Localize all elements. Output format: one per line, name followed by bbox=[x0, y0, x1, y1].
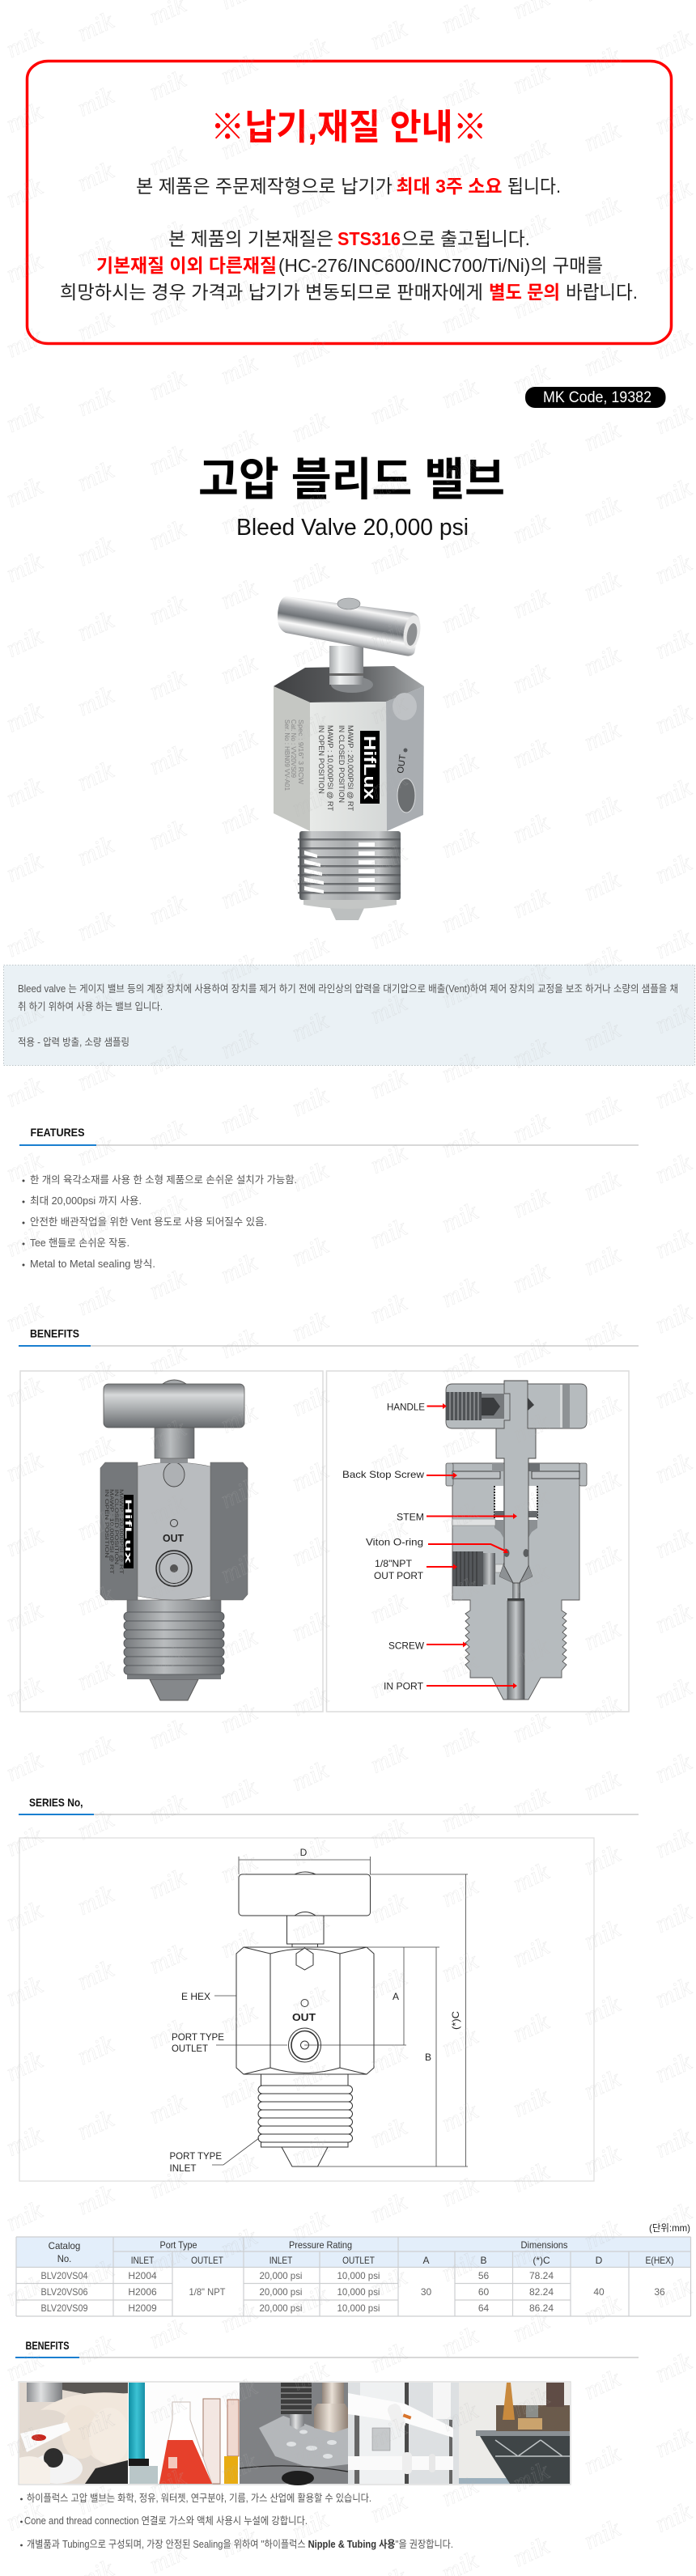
table rows: 56 bbox=[478, 2270, 489, 2281]
engraved specifications: IN CLOSED POSITION bbox=[337, 725, 346, 803]
notice line 3: 기본재질 이외 다른재질 bbox=[96, 255, 277, 276]
table rows: H2009 bbox=[128, 2302, 157, 2314]
table rows bbox=[40, 2270, 665, 2314]
table header: (*)C bbox=[533, 2255, 550, 2266]
panel: valve exterior drawing bbox=[20, 1371, 323, 1712]
table rows: BLV20VS04 bbox=[40, 2270, 88, 2281]
table header: INLET bbox=[269, 2255, 293, 2266]
dimension labels: (*)C bbox=[450, 2011, 461, 2030]
table header: OUTLET bbox=[191, 2255, 223, 2266]
table rows: 10,000 psi bbox=[337, 2286, 380, 2298]
table header: INLET bbox=[131, 2255, 155, 2266]
product photo: bleed valve: HifLux bbox=[360, 736, 378, 800]
badge: MK code bbox=[525, 387, 665, 408]
callout labels: HANDLE bbox=[387, 1402, 425, 1413]
dimension labels: OUTLET bbox=[172, 2043, 209, 2054]
table rows: 20,000 psi bbox=[259, 2302, 303, 2314]
threads bbox=[124, 1612, 224, 1674]
valve outline bbox=[236, 1872, 374, 2166]
callout labels: OUT PORT bbox=[374, 1570, 424, 1581]
list: features bbox=[23, 1174, 297, 1270]
badge: MK code: MK Code, 19382 bbox=[543, 389, 651, 406]
list: benefits: 하이플럭스 고압 밸브는 화학, 정유, 워터젯, 연구분야, 기름, 가스 산업에 활용할 수 있습니다. bbox=[27, 2493, 371, 2504]
O-rings bbox=[503, 1549, 510, 1557]
hex body bbox=[274, 666, 424, 702]
dimension lines bbox=[212, 1857, 468, 2166]
engraved specifications: MAWP : 20,000PSI @ RT bbox=[346, 725, 354, 811]
product photo: bleed valve: Spec : 9/16" 3 RCW bbox=[297, 719, 304, 785]
notice line 3: (HC-276/INC600/INC700/Ti/Ni)의 구매를 bbox=[278, 255, 603, 276]
notice line 1: 최대 3주 소요 bbox=[397, 176, 502, 197]
tip bbox=[150, 1679, 198, 1700]
port bbox=[156, 1551, 192, 1586]
table header: No. bbox=[57, 2253, 71, 2264]
table rows: 36 bbox=[654, 2286, 665, 2298]
engraved text bbox=[104, 1489, 124, 1574]
product photo: bleed valve bbox=[274, 596, 424, 920]
outlet marks on side face bbox=[403, 748, 408, 753]
table: specifications bbox=[16, 2237, 691, 2316]
body section bbox=[452, 1463, 579, 1700]
dimension labels: PORT TYPE bbox=[170, 2150, 222, 2162]
label plate bbox=[124, 1495, 134, 1568]
callout labels: 1/8"NPT bbox=[375, 1558, 413, 1569]
panel: dimension drawing bbox=[19, 1838, 594, 2181]
engraved specifications: MAWP : 10,000PSI @ RT bbox=[325, 725, 334, 811]
table rows: 60 bbox=[478, 2286, 489, 2298]
table rows: 40 bbox=[593, 2286, 605, 2298]
table header bbox=[49, 2239, 674, 2266]
callout labels bbox=[342, 1402, 425, 1691]
list: features: 한 개의 육각소재를 사용 한 소형 제품으로 손쉬운 설치가 가능함. bbox=[30, 1174, 297, 1186]
table header: Pressure Rating bbox=[289, 2239, 352, 2251]
table header: Port Type bbox=[160, 2239, 197, 2251]
top hole bbox=[163, 1462, 185, 1487]
engraved text: MAWP : 10,000PSI @ RT bbox=[108, 1489, 114, 1574]
notice line 4: 희망하시는 경우 가격과 납기가 변동되므로 판매자에게 bbox=[60, 282, 483, 303]
dimension labels: A bbox=[393, 1991, 399, 2002]
table rows: 64 bbox=[478, 2302, 489, 2314]
table rows: 10,000 psi bbox=[337, 2302, 380, 2314]
table header: Catalog bbox=[49, 2240, 80, 2251]
thread bbox=[330, 908, 364, 920]
application text: 적용 - 압력 방출, 소량 샘플링 bbox=[18, 1037, 129, 1048]
hex faces bbox=[100, 1462, 138, 1600]
dimension labels: D bbox=[300, 1847, 308, 1858]
engraved text: IN CLOSED POSITION bbox=[113, 1489, 119, 1564]
callout arrows bbox=[427, 1403, 517, 1688]
photo strip: applications bbox=[19, 2382, 571, 2485]
back stop screws bbox=[452, 1471, 500, 1479]
table rows: 1/8" NPT bbox=[189, 2286, 226, 2298]
table header: B bbox=[480, 2255, 487, 2266]
table rows: 82.24 bbox=[529, 2286, 554, 2298]
in port bore bbox=[507, 1601, 524, 1700]
description text line 2: 취 하기 위하여 사용 하는 밸브 입니다. bbox=[18, 1001, 163, 1012]
panel: valve exterior drawing: HifLux bbox=[123, 1499, 133, 1565]
dimension labels: B bbox=[425, 2052, 431, 2063]
table rows: 78.24 bbox=[529, 2270, 554, 2281]
stem bbox=[496, 1381, 536, 1583]
list: benefits: 개별품과 Tubing으로 구성되며, 가장 안정된 Sealing을 위하여 "하이플럭스 Nipple & Tubing 사용"을 권장합니다. bbox=[27, 2539, 453, 2550]
hex side hole bbox=[393, 693, 417, 720]
title: 고압 블리드 밸브 bbox=[198, 454, 505, 505]
outlet mark bbox=[170, 1520, 178, 1526]
notice line 4: 바랍니다. bbox=[566, 282, 638, 303]
neck and collar bbox=[331, 677, 373, 693]
table header: A bbox=[422, 2255, 430, 2266]
dimension labels bbox=[170, 1847, 461, 2174]
neck bbox=[160, 1458, 188, 1463]
photo: laboratory flask bbox=[128, 2383, 240, 2484]
table rows: BLV20VS09 bbox=[40, 2302, 88, 2314]
chamber bbox=[494, 1486, 503, 1520]
engraved specifications: IN OPEN POSITION bbox=[316, 725, 325, 794]
out port bbox=[452, 1551, 483, 1586]
engraved text: MAWP : 20,000PSI @ RT bbox=[118, 1489, 124, 1574]
notice line 1 bbox=[136, 176, 561, 197]
table rows: BLV20VS06 bbox=[40, 2286, 88, 2298]
table rows: H2004 bbox=[128, 2270, 157, 2281]
dimension labels: E HEX bbox=[181, 1991, 210, 2002]
notice line 2 bbox=[168, 228, 530, 249]
product photo: bleed valve: OUT bbox=[396, 753, 408, 774]
callout labels: Viton O-ring bbox=[366, 1537, 423, 1548]
list: benefits: Cone and thread connection 연결로 가스와 액체 사용시 누설에 강합니다. bbox=[24, 2515, 308, 2527]
table rows: 20,000 psi bbox=[259, 2270, 303, 2281]
section heading: FEATURES: FEATURES bbox=[31, 1126, 84, 1139]
photo: white piping bbox=[348, 2383, 459, 2484]
engraved text: IN OPEN POSITION bbox=[104, 1489, 109, 1558]
photo: microscope bbox=[19, 2383, 129, 2484]
panel: valve cross-section drawing bbox=[327, 1371, 629, 1712]
panel: delivery and material notice bbox=[28, 62, 672, 343]
seat and passage bbox=[499, 1562, 533, 1583]
callout labels: IN PORT bbox=[384, 1680, 424, 1691]
table rows: H2006 bbox=[128, 2286, 157, 2298]
unit note: (단위:mm) bbox=[649, 2222, 690, 2234]
dimension labels: INLET bbox=[170, 2162, 197, 2174]
table rows: 30 bbox=[421, 2286, 431, 2298]
table header: Dimensions bbox=[521, 2239, 568, 2251]
callout labels: Back Stop Screw bbox=[342, 1469, 424, 1480]
notice line 4: 별도 문의 bbox=[489, 282, 560, 303]
list: features: 최대 20,000psi 까지 사용. bbox=[30, 1195, 142, 1207]
panel: valve exterior drawing: OUT bbox=[163, 1532, 184, 1544]
product photo: bleed valve: Ser. No : HBN09 VV-A01 bbox=[283, 719, 291, 791]
notice line 1: 본 제품은 주문제작형으로 납기가 bbox=[136, 176, 393, 197]
head ears bbox=[446, 1463, 453, 1486]
product photo: bleed valve: Cat. No : VV20VS09 bbox=[290, 719, 297, 779]
table rows: 86.24 bbox=[529, 2302, 554, 2314]
subtitle: Bleed Valve 20,000 psi bbox=[236, 515, 469, 541]
label plate bbox=[360, 731, 380, 804]
handle right bbox=[528, 1384, 587, 1428]
photo: pressure jet nozzle bbox=[240, 2383, 348, 2485]
table header: D bbox=[596, 2255, 603, 2266]
handle left bbox=[446, 1384, 510, 1428]
notice line 2: STS316 bbox=[337, 228, 401, 249]
side bore bbox=[452, 1519, 495, 1526]
list: features: Metal to Metal sealing 방식. bbox=[30, 1258, 155, 1270]
list: benefits bbox=[20, 2493, 453, 2550]
notice line 2: 으로 출고됩니다. bbox=[401, 228, 530, 249]
engraved specifications bbox=[316, 725, 354, 811]
table rows: 20,000 psi bbox=[259, 2286, 303, 2298]
list: features: Tee 핸들로 손쉬운 작동. bbox=[30, 1237, 129, 1249]
section heading: SERIES No,: SERIES No, bbox=[29, 1796, 83, 1809]
panel: description bbox=[3, 965, 694, 1065]
dimension labels: PORT TYPE bbox=[172, 2031, 224, 2043]
table rows: 10,000 psi bbox=[337, 2270, 380, 2281]
notice line 3 bbox=[96, 255, 603, 276]
handle bbox=[163, 1380, 186, 1384]
callout labels: STEM bbox=[397, 1512, 424, 1523]
section heading: BENEFITS 2: BENEFITS bbox=[26, 2339, 70, 2352]
callout labels: SCREW bbox=[388, 1640, 425, 1651]
notice heading: ※납기,재질 안내※ bbox=[210, 108, 487, 147]
table header: E(HEX) bbox=[646, 2255, 674, 2266]
OUT label: OUT bbox=[292, 2011, 316, 2023]
T handle bbox=[278, 596, 420, 656]
table header: OUTLET bbox=[342, 2255, 375, 2266]
notice line 1: 됩니다. bbox=[507, 176, 561, 197]
section heading: BENEFITS: BENEFITS bbox=[30, 1327, 79, 1340]
notice line 2: 본 제품의 기본재질은 bbox=[168, 228, 333, 249]
list: features: 안전한 배관작업을 위한 Vent 용도로 사용 되어질수 있음. bbox=[30, 1216, 267, 1228]
photo: offshore platform bbox=[459, 2383, 570, 2484]
